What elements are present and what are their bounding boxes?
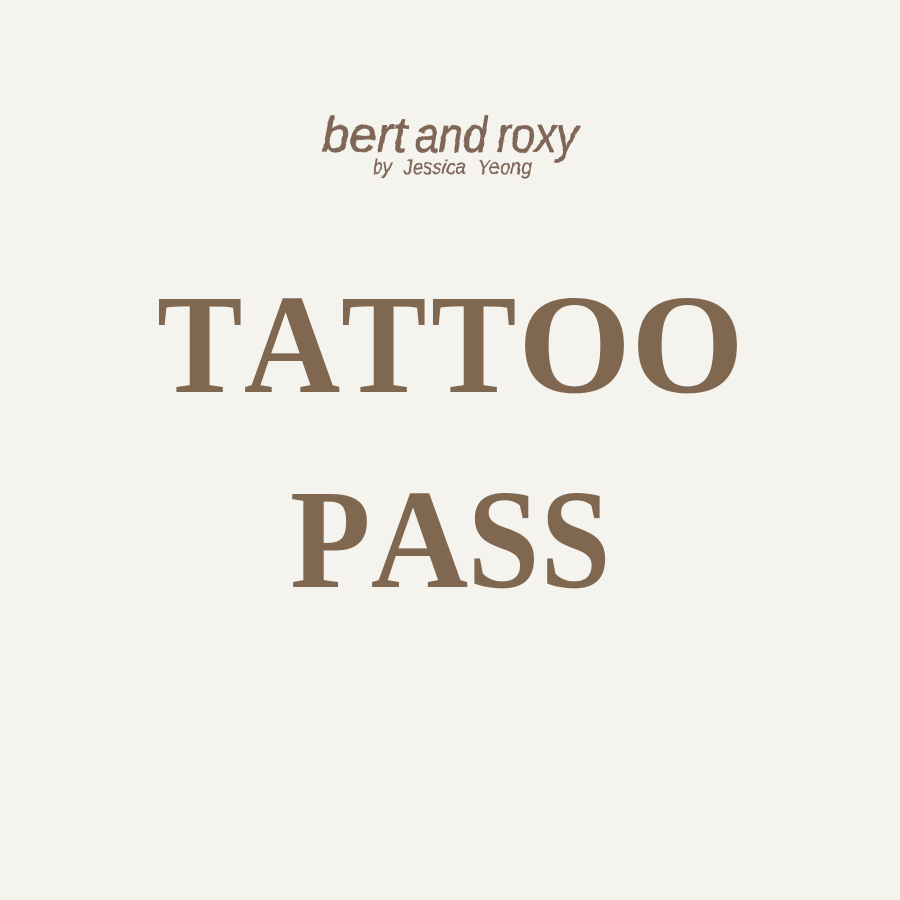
title — [157, 265, 744, 618]
title line 1: TATTOO: O — [518, 265, 631, 423]
logo: bert and roxy by Jessica Yeong — [322, 107, 581, 179]
title line 2: PASS: P — [290, 460, 371, 618]
logo byline: Jessica — [402, 156, 466, 179]
logo wordmark — [322, 107, 581, 163]
title line 2: PASS — [290, 460, 610, 618]
logo wordmark: roxy — [497, 107, 581, 163]
title line 1: TATTOO: O — [631, 265, 744, 423]
logo wordmark: bert — [322, 107, 409, 163]
title line 1: TATTOO: T — [157, 265, 242, 423]
title line 2: PASS: S — [468, 460, 540, 618]
logo wordmark: and — [415, 107, 489, 163]
title line 2: PASS: S — [540, 460, 610, 618]
title line 2: PASS: A — [371, 460, 468, 618]
title line 1: TATTOO: T — [431, 265, 516, 423]
logo byline — [373, 156, 532, 179]
logo byline: Yeong — [477, 156, 532, 179]
title line 1: TATTOO — [157, 265, 744, 423]
logo byline: by — [373, 156, 393, 179]
title line 1: TATTOO: A — [244, 265, 340, 423]
title line 1: TATTOO: T — [341, 265, 426, 423]
